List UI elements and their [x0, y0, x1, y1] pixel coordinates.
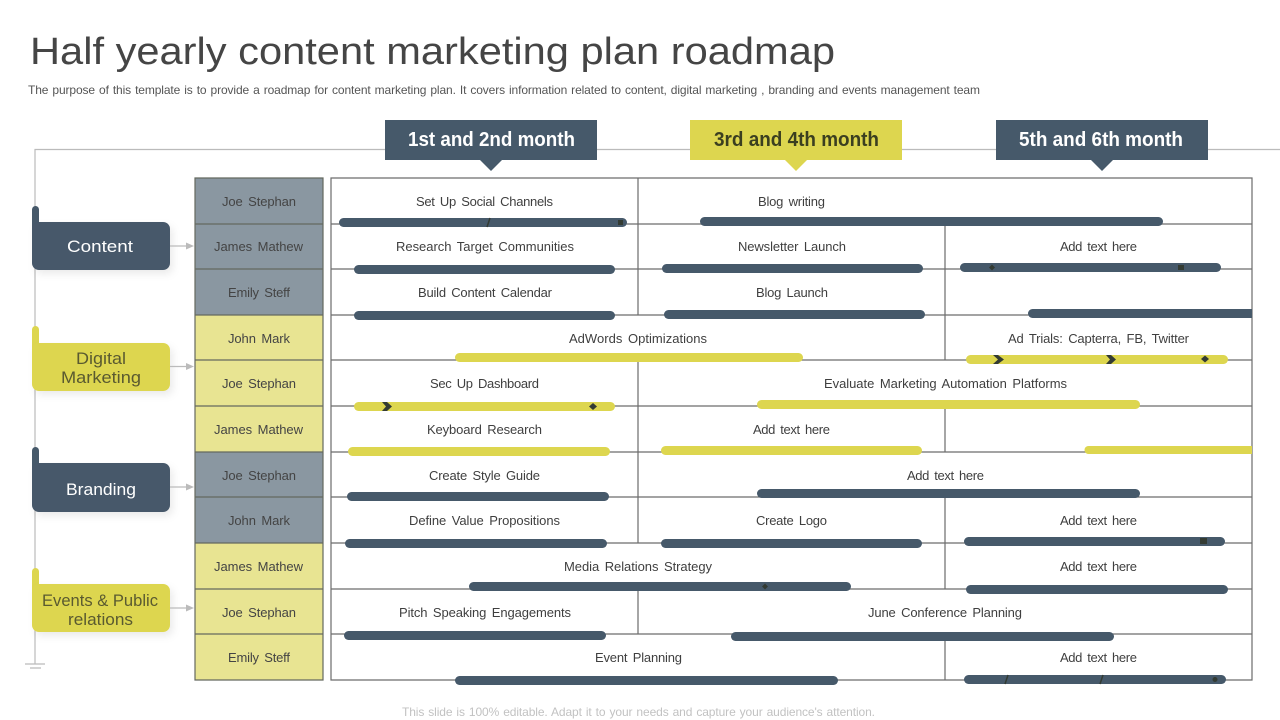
row 2: James Mathew tasks: Newsletter Launch — [738, 239, 846, 254]
row 4: John Mark tasks: AdWords Optimizations — [569, 331, 708, 346]
title: Half yearly content marketing plan roadmap — [30, 31, 835, 73]
row 4: John Mark tasks: Ad Trials: Capterra, FB, Twitter — [1008, 331, 1190, 346]
row 1: Joe Stephan tasks — [339, 194, 1163, 227]
row 1: Joe Stephan tasks: Blog writing — [758, 194, 825, 209]
row 8: John Mark tasks: Add text here — [1060, 513, 1137, 528]
schedule grid — [331, 178, 1252, 680]
row 5: Joe Stephan tasks: Evaluate Marketing Automation Platforms — [824, 376, 1068, 391]
row 11: Emily Steff tasks: Add text here — [1060, 650, 1137, 665]
row 5: Joe Stephan tasks: Sec Up Dashboard — [430, 376, 539, 391]
row 2: James Mathew tasks: Add text here — [1060, 239, 1137, 254]
category: Branding: Branding — [66, 480, 136, 499]
row 6: James Mathew tasks: Keyboard Research — [427, 422, 542, 437]
row 3: Emily Steff tasks — [354, 285, 1252, 320]
owner column: Joe Stephan — [222, 376, 296, 391]
month header: 5th and 6th month — [996, 120, 1208, 171]
owner column: James Mathew — [214, 559, 304, 574]
row 10: Joe Stephan tasks: June Conference Planning — [868, 605, 1022, 620]
row 9: James Mathew tasks — [469, 559, 1228, 594]
row 7: Joe Stephan tasks: Create Style Guide — [429, 468, 540, 483]
row 11: Emily Steff tasks — [455, 650, 1226, 685]
owner column: Emily Steff — [228, 285, 290, 300]
row 8: John Mark tasks — [345, 513, 1225, 548]
row 7: Joe Stephan tasks: Add text here — [907, 468, 984, 483]
row 11: Emily Steff tasks: Event Planning — [595, 650, 682, 665]
row 9: James Mathew tasks: Add text here — [1060, 559, 1137, 574]
category: Digital Marketing: Digital — [76, 349, 126, 368]
row 6: James Mathew tasks — [348, 422, 1252, 456]
row 5: Joe Stephan tasks — [354, 376, 1140, 411]
row 1: Joe Stephan tasks: Set Up Social Channels — [416, 194, 554, 209]
row 2: James Mathew tasks: Research Target Communities — [396, 239, 574, 254]
row 6: James Mathew tasks: Add text here — [753, 422, 830, 437]
row 3: Emily Steff tasks: Blog Launch — [756, 285, 828, 300]
owner column: James Mathew — [214, 422, 304, 437]
row 4: John Mark tasks — [455, 331, 1228, 364]
owner column: James Mathew — [214, 239, 304, 254]
month header: 1st and 2nd month — [385, 120, 597, 171]
category: Content: Content — [67, 237, 133, 256]
category: Digital Marketing — [32, 326, 194, 391]
category: Digital Marketing: Marketing — [61, 368, 141, 387]
owner column: Emily Steff — [228, 650, 290, 665]
row 10: Joe Stephan tasks: Pitch Speaking Engagements — [399, 605, 572, 620]
row 8: John Mark tasks: Define Value Propositions — [409, 513, 560, 528]
category: Content — [32, 206, 194, 270]
row 9: James Mathew tasks: Media Relations Strategy — [564, 559, 712, 574]
owner column: Joe Stephan — [222, 194, 296, 209]
row 8: John Mark tasks: Create Logo — [756, 513, 827, 528]
category: Events & Public relations — [32, 568, 194, 632]
row 10: Joe Stephan tasks — [344, 605, 1114, 641]
footer note: This slide is 100% editable. Adapt it to your needs and capture your audience's attention. — [402, 705, 875, 719]
row 3: Emily Steff tasks: Build Content Calendar — [418, 285, 553, 300]
timeline frame connector — [25, 150, 1280, 668]
owner column: John Mark — [228, 513, 290, 528]
month header: 5th and 6th month: 5th and 6th month — [1019, 129, 1183, 151]
owner column — [195, 178, 323, 680]
owner column: John Mark — [228, 331, 290, 346]
month header: 3rd and 4th month — [690, 120, 902, 171]
category: Branding — [32, 447, 194, 512]
row 2: James Mathew tasks — [354, 239, 1221, 274]
subtitle description: The purpose of this template is to provide a roadmap for content marketing plan. It covers information related to content, digital marketing , branding and events management team — [28, 83, 980, 97]
month header: 1st and 2nd month: 1st and 2nd month — [408, 129, 575, 151]
category: Events & Public relations: relations — [68, 610, 133, 629]
row 7: Joe Stephan tasks — [347, 468, 1140, 501]
month header: 3rd and 4th month: 3rd and 4th month — [714, 129, 879, 151]
owner column: Joe Stephan — [222, 605, 296, 620]
owner column: Joe Stephan — [222, 468, 296, 483]
category: Events & Public relations: Events & Public — [42, 591, 158, 610]
